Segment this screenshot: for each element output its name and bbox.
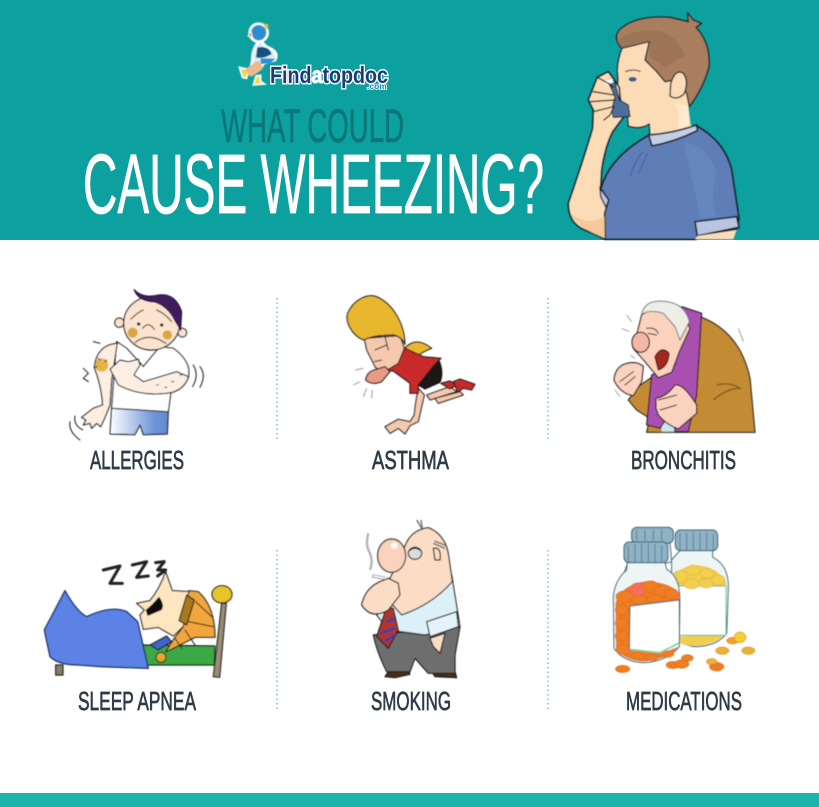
- panel: medications: [613, 527, 755, 716]
- panel: smoking: [362, 520, 460, 716]
- panel: allergies: [70, 289, 203, 475]
- logo .com: .com: [367, 81, 387, 91]
- panel: asthma: [347, 296, 475, 475]
- divider column left: [276, 298, 278, 712]
- heading: what could: WHAT COULD: [221, 99, 404, 152]
- footer band: [0, 793, 819, 807]
- collar: [649, 125, 697, 146]
- logo wordmark: Findatopdoc: [270, 62, 388, 88]
- label: medications: MEDICATIONS: [626, 686, 742, 716]
- icon: old man coughing: [614, 301, 755, 432]
- icon: man snoring in bed: [44, 562, 232, 677]
- label: smoking: SMOKING: [371, 686, 451, 716]
- icon: woman coughing on hands and knees: [347, 296, 475, 434]
- icon: duck mascot: [239, 23, 276, 85]
- divider column right: [547, 298, 549, 712]
- head and neck: [617, 30, 703, 146]
- arm: [568, 72, 625, 239]
- orange bottle: [613, 563, 680, 663]
- logo: Findatopdoc: [239, 23, 388, 91]
- yellow bottle: [672, 530, 728, 647]
- icon: pill bottles: [613, 527, 755, 673]
- shirt: [601, 126, 739, 239]
- label: allergies: ALLERGIES: [90, 445, 184, 475]
- back bottle: [623, 527, 673, 575]
- label: asthma: ASTHMA: [372, 445, 449, 475]
- icon: scratching man with rash: [70, 289, 203, 440]
- ear: [670, 72, 686, 98]
- panel: sleep apnea: [44, 562, 232, 716]
- label: sleep apnea: SLEEP APNEA: [78, 686, 196, 716]
- panel: bronchitis: [614, 301, 755, 475]
- label: bronchitis: BRONCHITIS: [631, 445, 736, 475]
- eye: [629, 77, 637, 82]
- inhaler: [607, 78, 630, 117]
- header band: [0, 0, 819, 240]
- illustration: boy using inhaler: [568, 13, 739, 239]
- fingers: [589, 77, 615, 120]
- hair: [616, 13, 709, 107]
- icon: man smoking a cigarette: [362, 520, 460, 678]
